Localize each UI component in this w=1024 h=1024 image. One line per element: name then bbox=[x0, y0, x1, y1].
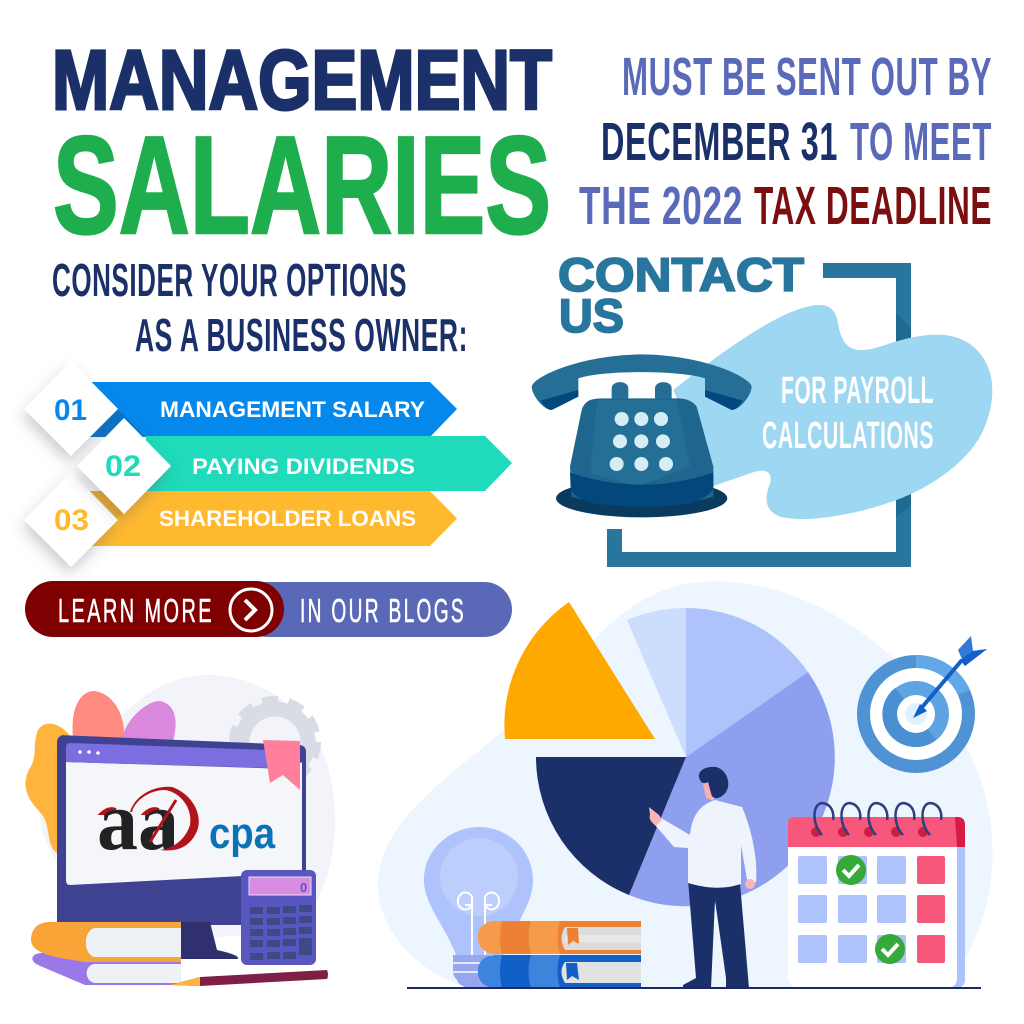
deadline text block: DECEMBER 31 bbox=[601, 112, 838, 172]
logo: aa cpa bbox=[97, 775, 275, 868]
check marks bbox=[836, 855, 905, 964]
monitor bbox=[57, 735, 306, 959]
subheading: consider your options: AS A BUSINESS OWNER: bbox=[135, 309, 468, 361]
option 03 ribbon: shareholder loans bbox=[90, 491, 457, 546]
heading: contact us: CONTACT bbox=[558, 248, 804, 301]
pencil bbox=[170, 970, 328, 986]
decorative leaves bbox=[25, 691, 176, 853]
option 02 ribbon: paying dividends bbox=[146, 436, 512, 491]
title: Management Salaries: SALARIES bbox=[53, 108, 551, 263]
heading: contact us: US bbox=[559, 289, 624, 342]
blob text bbox=[762, 370, 934, 457]
button: learn more in our blogs bbox=[25, 581, 512, 637]
option 01 ribbon: management salary: MANAGEMENT SALARY bbox=[160, 397, 425, 422]
person bbox=[649, 767, 756, 988]
option 03 diamond bbox=[24, 472, 118, 567]
logo: aa cpa: cpa bbox=[209, 809, 275, 858]
illustration: computer with logo bbox=[25, 675, 335, 986]
logo: aa cpa: aa bbox=[97, 775, 179, 868]
option 03 ribbon: shareholder loans: SHAREHOLDER LOANS bbox=[159, 506, 416, 531]
deadline text block: THE 2022 bbox=[579, 176, 743, 236]
options list bbox=[24, 361, 512, 567]
frame bbox=[607, 263, 911, 567]
contact us panel bbox=[532, 248, 992, 567]
icon: light bulb bbox=[424, 827, 533, 988]
title: Management Salaries: MANAGEMENT bbox=[52, 33, 552, 127]
button: learn more in our blogs: LEARN MORE bbox=[58, 592, 214, 629]
background blob bbox=[39, 675, 335, 937]
subheading: consider your options: CONSIDER YOUR OPTIONS bbox=[52, 254, 407, 306]
button: learn more in our blogs: IN OUR BLOGS bbox=[300, 592, 466, 629]
option 01 diamond: 01 bbox=[54, 394, 87, 427]
option 02 diamond bbox=[77, 418, 171, 514]
subheading: consider your options bbox=[52, 254, 468, 361]
option 02 diamond: 02 bbox=[105, 450, 141, 483]
ground line bbox=[407, 987, 981, 989]
pie chart bbox=[504, 602, 835, 906]
gear bbox=[233, 700, 317, 784]
illustration: analytics scene bbox=[378, 581, 993, 989]
books bbox=[31, 922, 181, 985]
deadline text block bbox=[579, 47, 992, 236]
option 02 ribbon: paying dividends: PAYING DIVIDENDS bbox=[192, 454, 415, 479]
calendar bbox=[788, 803, 965, 988]
background blob bbox=[378, 581, 993, 988]
books bbox=[478, 921, 641, 988]
icon: telephone bbox=[532, 354, 752, 517]
speech blob bbox=[673, 305, 992, 519]
option 01 ribbon: management salary bbox=[90, 382, 457, 437]
calculator bbox=[241, 870, 316, 965]
heading: contact us bbox=[558, 248, 804, 342]
frame shadow accents bbox=[896, 313, 911, 517]
option 01 diamond bbox=[24, 361, 118, 456]
calculator: 0 bbox=[300, 880, 307, 895]
option 03 diamond: 03 bbox=[54, 504, 89, 537]
title: Management Salaries bbox=[52, 33, 552, 263]
icon: target with arrow bbox=[857, 636, 987, 773]
